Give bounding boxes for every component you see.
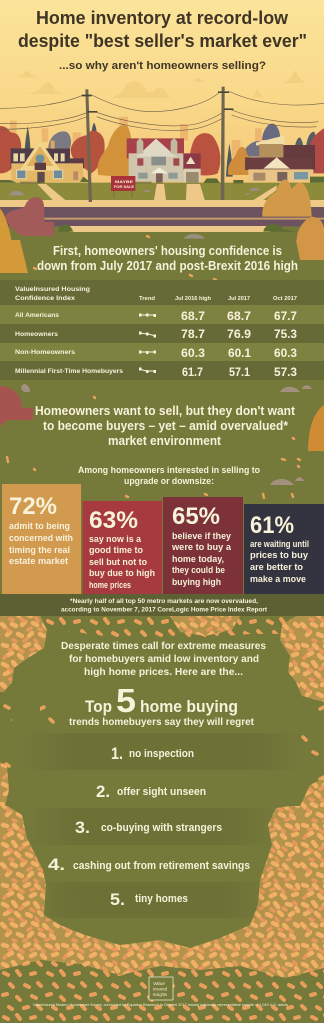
card: 61%: make a move (250, 574, 306, 585)
row: homeowners (15, 327, 297, 341)
sign label: FOR SALE (114, 185, 135, 189)
card: 63%: sell but not to (89, 557, 147, 568)
section heading: housing confidence: down from July 2017 and post-Brexit 2016 high (37, 259, 298, 273)
card: 72%: concerned with (9, 533, 73, 544)
row: all americans: 68.7 (181, 309, 205, 323)
heading: top 5 home buying: Top (85, 697, 112, 716)
table row bands (0, 280, 324, 380)
distant towers (10, 117, 262, 157)
intro text (78, 465, 260, 486)
table header: Confidence Index (15, 295, 75, 302)
item 5 (110, 890, 188, 909)
card: 61%: 61% (250, 512, 294, 539)
row: non-homeowners (15, 346, 297, 360)
card: 65%: were to buy a (171, 542, 232, 553)
section heading: desperate times: for homebuyers amid low inventory and (69, 653, 259, 665)
foreground bushes and trees (58, 224, 297, 232)
sign label: MAYBE (115, 179, 133, 184)
footnote band: *Nearly half of all top 50 metro markets are now overvalued, (70, 598, 258, 605)
intro text: Among homeowners interested in selling to (78, 465, 260, 475)
item 1: 1. (111, 744, 123, 763)
decorative foliage at section edges (0, 236, 324, 498)
row: non-homeowners: 60.3 (181, 346, 205, 360)
house 2 (127, 138, 201, 183)
item 5: tiny homes (135, 893, 188, 905)
intro text: upgrade or downsize: (124, 476, 214, 486)
sidewalk (0, 200, 324, 207)
list: top 5 regrets (20, 733, 305, 918)
heading: top 5 home buying: 5 (116, 682, 136, 719)
title: despite "best seller's market ever" (18, 31, 307, 51)
card: 63%: good time to (89, 545, 143, 556)
table: housing confidence index (0, 280, 324, 380)
table header: ValueInsured Housing (15, 286, 90, 293)
walkways (37, 184, 277, 200)
item 2 (96, 782, 206, 801)
item 4: cashing out from retirement savings (73, 860, 250, 872)
item 2: offer sight unseen (117, 786, 206, 798)
card: 72% (2, 484, 81, 594)
card: 63% (82, 501, 162, 594)
row: homeowners: Homeowners (15, 331, 58, 338)
row: millennial first-time homebuyers (15, 365, 297, 379)
heading: top 5 home buying: trends homebuyers say they will regret (69, 716, 254, 728)
clouds (17, 71, 306, 98)
list bands (20, 733, 305, 918)
row: all americans: 67.7 (274, 309, 297, 323)
item 3 (75, 818, 222, 837)
row: all americans: 68.7 (227, 309, 251, 323)
rocks (9, 188, 260, 195)
item 3: 3. (75, 818, 90, 837)
section heading: want to sell: to become buyers – yet – amid overvalued* (43, 419, 288, 433)
table header: Jul 2017 (228, 296, 250, 302)
card: 63%: 63% (89, 507, 138, 534)
card: 61%: are better to (250, 562, 303, 573)
title: Home inventory at record-low (36, 8, 289, 28)
row: millennial first-time homebuyers: 57.1 (229, 365, 250, 379)
source note: ValueInsured Modern Homebuyer Survey, conducted by Equation Research in October 2017 among nationally representative sample of 1,019 U.S. adults (33, 1003, 288, 1007)
card: 63%: buy due to high (89, 568, 155, 579)
row: all americans: All Americans (15, 312, 59, 319)
section heading: want to sell: Homeowners want to sell, but they don't want (35, 404, 296, 418)
card: 72%: 72% (9, 493, 57, 520)
row: non-homeowners: 60.1 (228, 346, 251, 360)
footnote band: according to November 7, 2017 CoreLogic Home Price Index Report (61, 606, 267, 614)
row: millennial first-time homebuyers: 57.3 (274, 365, 297, 379)
row: all americans (15, 309, 297, 323)
row: non-homeowners: 60.3 (274, 346, 297, 360)
sky (0, 0, 324, 185)
card: 72%: timing the real (9, 545, 70, 556)
section heading: want to sell (35, 404, 296, 448)
card: 61%: prices to buy (250, 550, 309, 561)
item 4: 4. (48, 855, 65, 874)
road (0, 207, 324, 226)
for sale sign (111, 176, 135, 198)
illustration: neighborhood street scene (0, 0, 324, 240)
house 1 (11, 140, 84, 183)
section heading: housing confidence: First, homeowners' housing confidence is (53, 244, 282, 258)
background trees (0, 123, 324, 178)
card: 65%: 65% (172, 503, 220, 530)
table header (15, 286, 297, 302)
card: 72%: admit to being (9, 521, 70, 532)
row: homeowners: 76.9 (227, 327, 251, 341)
heading: top 5 home buying: home buying (140, 697, 238, 716)
card: 65%: believe if they (172, 531, 232, 542)
card: 63%: say now is a (89, 534, 142, 545)
section heading: want to sell: market environment (108, 434, 222, 448)
row: millennial first-time homebuyers: 61.7 (182, 365, 203, 379)
item 4 (48, 855, 250, 874)
title (18, 8, 307, 51)
card: 61% (244, 504, 324, 594)
section heading: housing confidence (37, 244, 298, 273)
item 3: co-buying with strangers (101, 822, 222, 834)
card: 65%: home today, (172, 554, 224, 565)
section heading: desperate times (61, 640, 266, 678)
card: 61%: are waiting until (250, 539, 309, 550)
row: homeowners: 75.3 (274, 327, 297, 341)
house 3 (245, 135, 315, 181)
table header: Trend (139, 296, 155, 302)
row: homeowners: 78.7 (181, 327, 205, 341)
card: 65%: buying high (172, 577, 221, 588)
section heading: desperate times: high home prices. Here are the... (84, 666, 243, 678)
footnote band (0, 594, 324, 616)
card: 65%: they could be (172, 565, 225, 576)
table header: Oct 2017 (273, 296, 297, 302)
item 1 (111, 744, 194, 763)
item 5: 5. (110, 890, 125, 909)
logo: value insured insights: Value (153, 981, 166, 986)
card: 63%: home prices (89, 580, 131, 591)
card: 65% (163, 497, 243, 594)
item 1: no inspection (129, 748, 194, 760)
logo: value insured insights: Insured (153, 986, 167, 992)
row: millennial first-time homebuyers: Millennial First-Time Homebuyers (15, 368, 123, 375)
table header: Jul 2016 high (175, 296, 212, 302)
fallen leaves frame (0, 612, 324, 1023)
logo: value insured insights (149, 977, 173, 1000)
power poles and wires (0, 92, 324, 131)
subtitle: ...so why aren't homeowners selling? (59, 60, 266, 72)
logo: value insured insights: Insights (153, 992, 168, 997)
section heading: desperate times: Desperate times call for extreme measures (61, 640, 266, 652)
heading: top 5 home buying (69, 682, 254, 728)
item 2: 2. (96, 782, 110, 801)
sign label (114, 179, 135, 189)
lawn and hedges (0, 183, 324, 201)
card: 72%: estate market (9, 556, 69, 567)
row: non-homeowners: Non-Homeowners (15, 349, 75, 356)
